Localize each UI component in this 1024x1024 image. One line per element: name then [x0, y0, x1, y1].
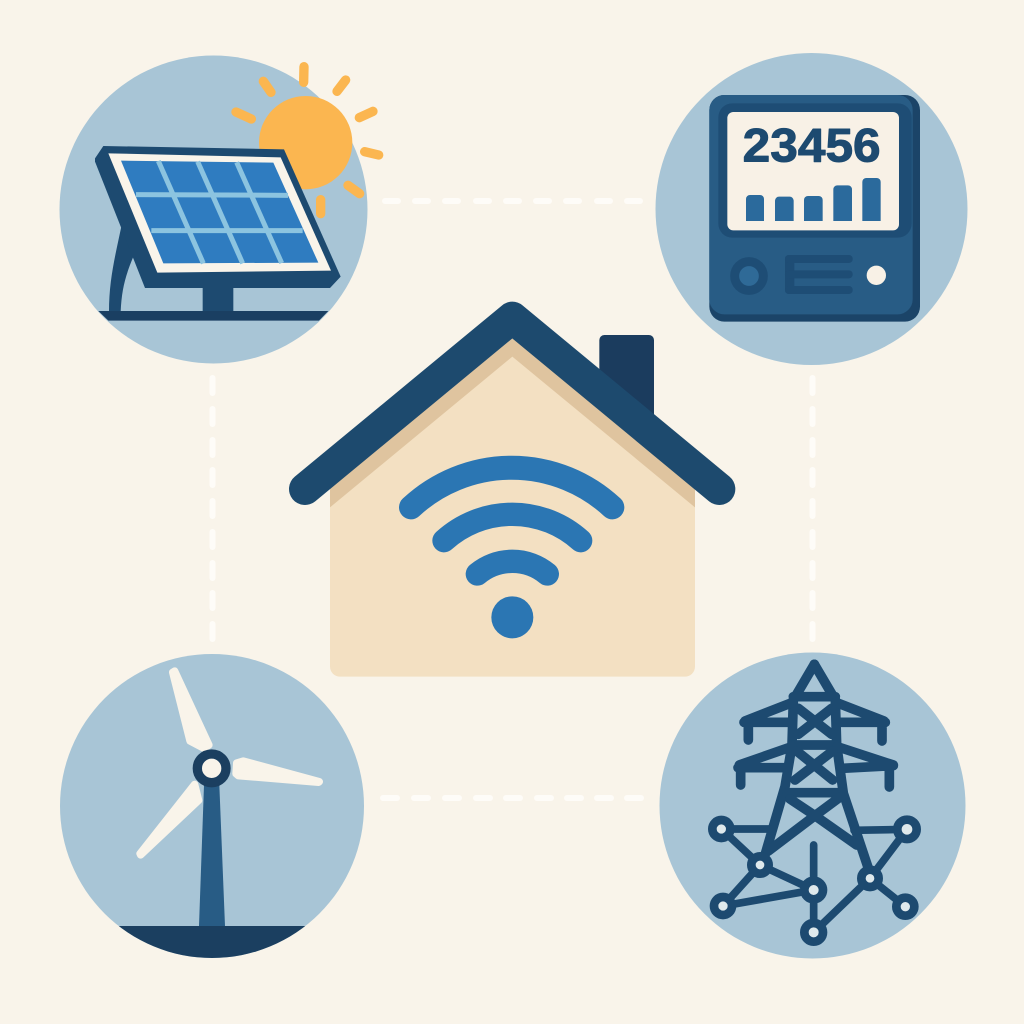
icon: transmission tower: [738, 664, 893, 868]
connector: meter to grid: [810, 375, 816, 642]
icon: sun: [236, 67, 379, 214]
icon: network nodes: [712, 820, 917, 942]
icon: ground: [118, 926, 306, 958]
icon: wind turbine: [140, 671, 319, 926]
wind circle background: [60, 654, 364, 958]
connector: turbine to grid: [380, 795, 644, 801]
central house with wifi: [305, 318, 719, 677]
house roof: [305, 318, 719, 489]
panel: wind energy: [60, 654, 364, 958]
panel: power grid: [660, 652, 966, 958]
icon: solar panel: [95, 146, 341, 321]
house chimney: [599, 335, 654, 423]
meter vent: [785, 255, 853, 294]
house wall: [330, 347, 695, 677]
connector: solar to turbine: [210, 375, 216, 642]
grid circle background: [660, 652, 966, 958]
panel: solar energy: [60, 56, 379, 364]
roof shadow: [330, 337, 695, 507]
icon: smart meter: [709, 95, 920, 322]
meter reading: 23456: [743, 119, 881, 172]
meter bar chart: [746, 178, 881, 221]
meter circle background: [656, 53, 968, 365]
meter screen: [727, 112, 899, 230]
icon: wifi signal: [411, 468, 612, 638]
meter indicator light: [867, 266, 886, 285]
solar circle background: [60, 56, 368, 364]
panel: smart meter: [656, 53, 968, 365]
connector: solar to meter: [382, 198, 643, 204]
meter dial: [735, 262, 763, 290]
